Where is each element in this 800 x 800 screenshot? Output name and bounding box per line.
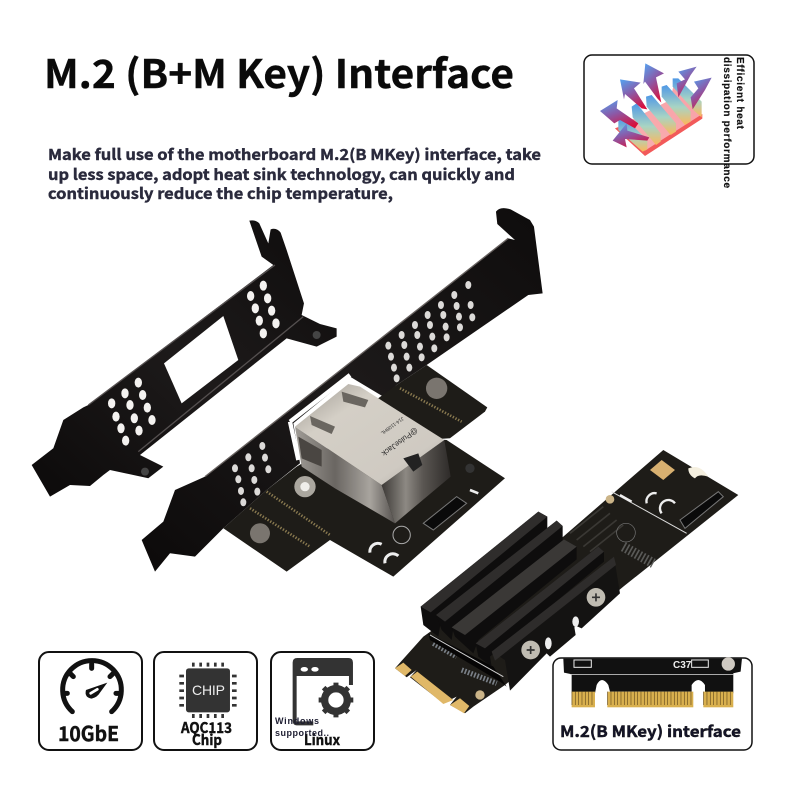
fin 3 [452,539,577,653]
overlay label: Windows [275,716,319,726]
label: M.2(B MKey) interface [560,720,741,742]
fin 2 [436,521,563,640]
network card with full height bracket [142,208,543,577]
overlay label: supported.. [275,728,329,738]
rj45 jack: @PulseJack [380,426,420,458]
overlay label [275,716,329,738]
gold fingers [411,672,453,704]
label: AQC113 [180,717,232,738]
description text: up less space, adopt heat sink technology, can quickly and [48,164,515,185]
pcb pin rows [250,388,462,547]
vertical label [721,57,745,188]
fin 4 [476,547,604,667]
description text [48,144,541,204]
notch [688,467,708,478]
label: Linux [304,729,340,750]
pcb front [223,433,505,577]
title: M.2 (B+M Key) Interface [44,44,514,100]
screws [250,523,270,543]
rj45 jack: J14-1108HL [379,415,405,436]
panel: heat dissipation [584,55,754,188]
fin 1 [421,512,547,637]
panel: m.2 interface inset [553,657,752,750]
panel: m.2 interface inset: C37 [673,660,692,671]
pcb rear [367,365,487,440]
connector [423,497,467,530]
label [180,717,232,750]
m.2 pcb [395,450,738,713]
panel: OS support [271,652,374,750]
description text: Make full use of the motherboard M.2(B MKey) interface, take [48,144,541,165]
vertical label: dissipation performance [721,57,732,188]
panel: 10GbE [39,652,142,750]
m.2 card with heat sink [395,450,738,713]
panel: AQC113 chip: CHIP [192,682,225,698]
icon: speedometer [63,661,121,712]
gold pad [650,460,675,480]
ce mark [370,543,398,563]
low profile bracket [32,220,337,497]
heat sink [421,512,620,691]
label: Chip [192,729,222,750]
panel: AQC113 chip [154,652,257,750]
full height bracket [142,208,543,572]
bracket perforations [232,281,475,506]
description text: continuously reduce the chip temperature, [48,183,393,204]
label: 10GbE [58,718,119,747]
pcb markings [612,492,687,533]
vertical label: Efficient heat [734,57,745,130]
fingers image [563,657,742,707]
icon: chip [179,663,237,718]
icon: heat sink with arrows [600,63,712,156]
base plate [492,557,620,691]
rj45 jack [290,375,451,523]
screws [587,588,605,607]
icon: window with gear [295,660,353,723]
